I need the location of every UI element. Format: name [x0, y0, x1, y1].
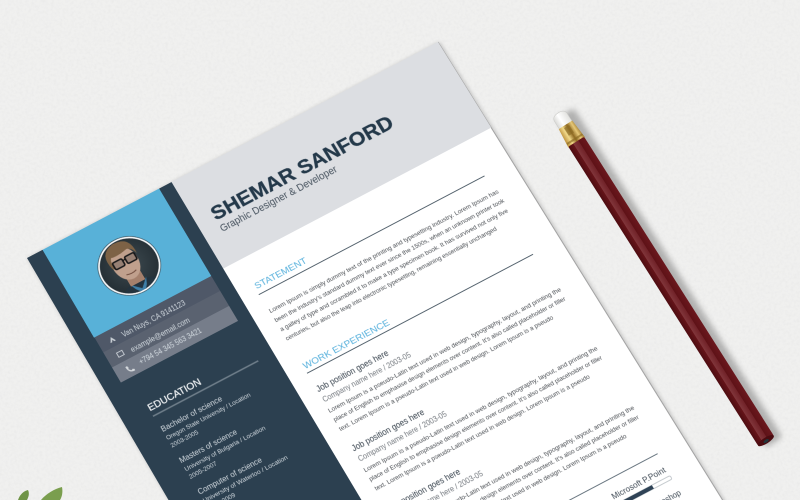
- icon: phone: [125, 364, 135, 374]
- education item 2: University of Bulgaria / Location: [181, 419, 263, 466]
- job 2: Company name here / 2003-05: [350, 402, 440, 455]
- contact band: phone: +794 54 345 563 3421: [136, 323, 202, 363]
- education item 3: Computer of science: [192, 447, 260, 488]
- pencil end cap: [756, 433, 775, 448]
- statement paragraph: Lorem Ipsum is simply dummy text of the printing and typesetting industry. Lorem Ipsum has: [266, 187, 496, 312]
- job 1: text. Lorem Ipsum is a pseudo-Latin text used in web design. Lorem Ipsum is a pseudo: [332, 309, 547, 426]
- contact band: phone: [112, 306, 238, 383]
- icon: envelope: [116, 350, 124, 357]
- job 1: place of English to emphasise design elements over content. It's also called placeholder or filler: [327, 292, 559, 417]
- job 2: Job position goes here: [344, 400, 419, 445]
- statement heading: STATEMENT: [251, 254, 307, 289]
- header band: [172, 42, 491, 269]
- job 2: Lorem Ipsum is a pseudo-Latin text used in web design, typography, layout, and printing the: [356, 339, 589, 465]
- statement paragraph: a galley of type and scrambled it to make a type specimen book. It has survived not only five: [276, 206, 505, 330]
- ferrule: [557, 120, 585, 148]
- education item 2: 2005-2007: [185, 453, 215, 473]
- education item 2: [177, 414, 272, 481]
- job 1: Company name here / 2003-05: [316, 345, 407, 398]
- contact band: address: Van Nuys, CA 9141123: [119, 296, 186, 337]
- role subtitle: Graphic Designer & Developer: [217, 163, 339, 234]
- profile photo: [97, 236, 162, 296]
- job 1: Lorem Ipsum is a pseudo-Latin text used in web design, typography, layout, and printing the: [322, 282, 555, 408]
- statement paragraph: centuries, but also the leap into electronic typesetting, remaining essentially unchanged: [281, 223, 494, 339]
- job 2: text. Lorem Ipsum is a pseudo-Latin text used in web design. Lorem Ipsum is a pseudo: [366, 366, 580, 482]
- job 2: place of English to emphasise design elements over content. It's also called placeholder or filler: [361, 348, 592, 474]
- education item 2: Masters of science: [175, 421, 236, 458]
- ferrule dark mottling: [559, 121, 583, 145]
- pencil body: [568, 137, 774, 446]
- education heading: EDUCATION: [144, 373, 201, 409]
- education item 1: 2003-2005: [167, 423, 198, 443]
- contact band: address: [94, 276, 220, 352]
- blue profile panel: [43, 189, 211, 338]
- education item 1: Oregon State University / Location: [163, 387, 249, 436]
- icon: location: [108, 336, 116, 343]
- education item 1: Bachelor of science: [157, 389, 222, 428]
- contact band: email: [103, 291, 229, 367]
- plant leaves: [18, 487, 62, 500]
- job 1: Job position goes here: [310, 343, 385, 388]
- work experience heading: WORK EXPERIENCE: [297, 314, 387, 366]
- statement paragraph: been the industry's standard dummy text ever since the 1500s, when an unknown printer took: [271, 196, 502, 321]
- contact band: email: example@email.com: [128, 314, 190, 351]
- sidebar: [27, 182, 362, 500]
- eraser: [552, 109, 573, 131]
- name: SHEMAR SANFORD: [206, 111, 397, 224]
